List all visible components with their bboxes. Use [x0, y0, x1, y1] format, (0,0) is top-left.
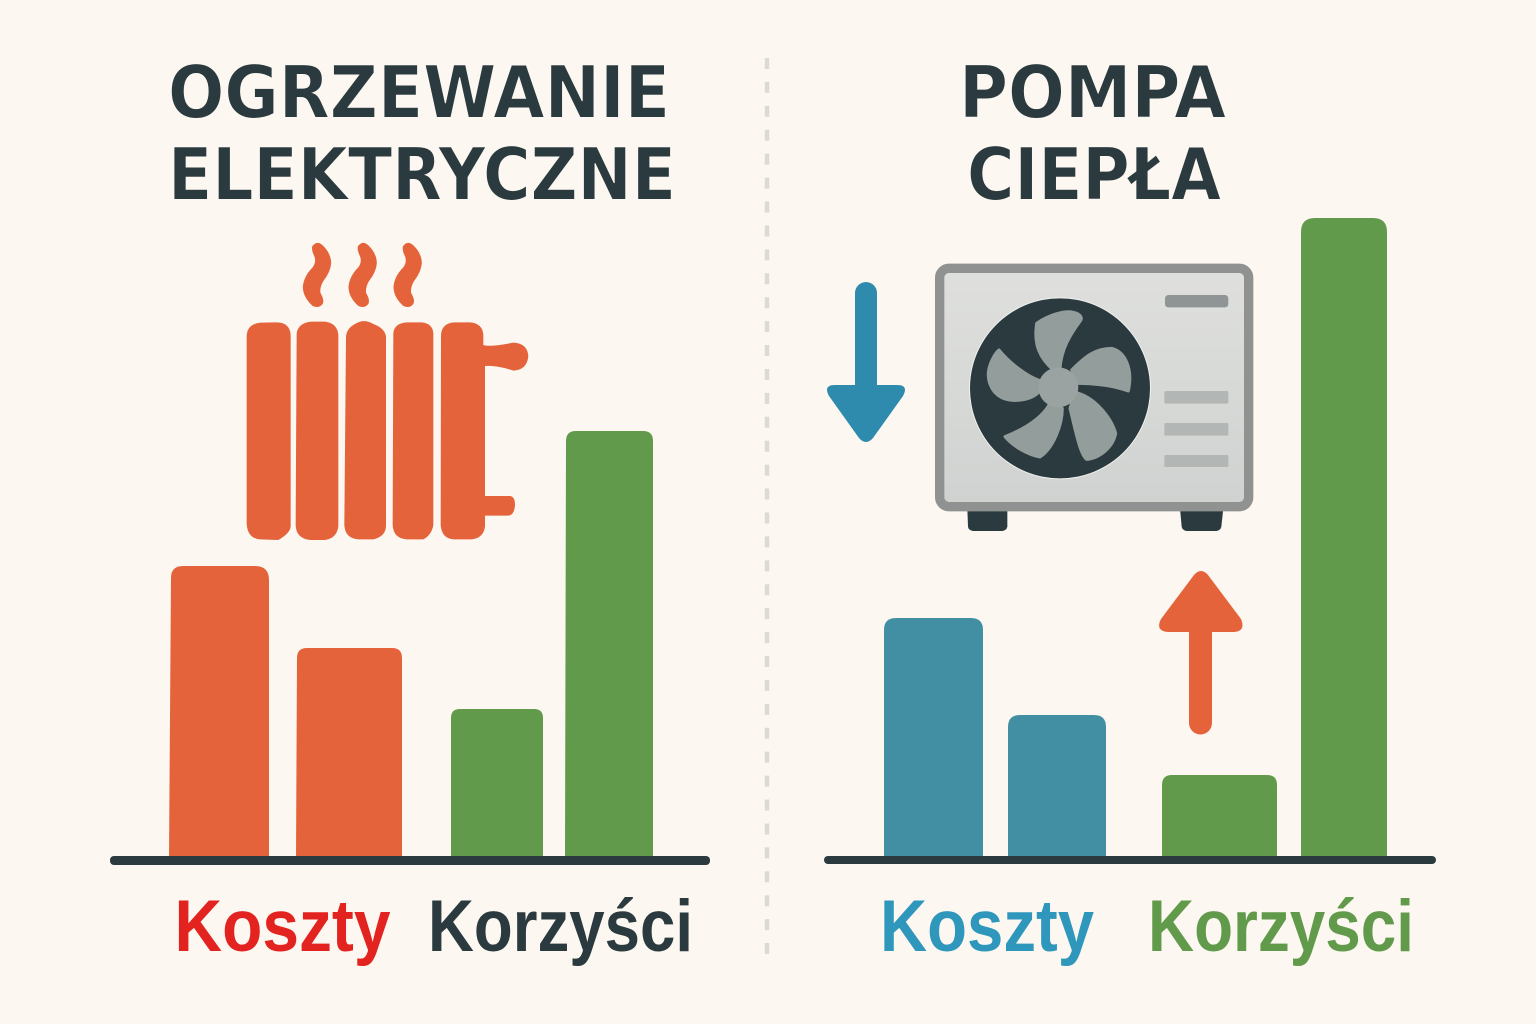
title: ogrzewanie elektryczne: OGRZEWANIE [168, 50, 670, 134]
icon: radiator with heat waves [247, 244, 528, 540]
arrow: down blue [827, 282, 905, 442]
icon: heat waves [304, 244, 421, 306]
title: pompa ciepła: CIEPŁA [967, 132, 1221, 216]
icon: heat pump outdoor unit [940, 268, 1249, 531]
title: ogrzewanie elektryczne [168, 50, 676, 216]
bar chart: electric heating [110, 431, 710, 865]
title: ogrzewanie elektryczne: ELEKTRYCZNE [168, 132, 676, 216]
labels: electric heating: Koszty [174, 886, 391, 967]
labels: heat pump [880, 886, 1414, 967]
arrow: up orange [1159, 571, 1242, 734]
labels: heat pump: Korzyści [1148, 886, 1414, 967]
labels: heat pump: Koszty [880, 886, 1094, 967]
bar chart: heat pump [824, 218, 1436, 864]
labels: electric heating [174, 886, 693, 967]
labels: electric heating: Korzyści [428, 886, 693, 967]
icon: fan [969, 297, 1151, 479]
title: pompa ciepła: POMPA [959, 50, 1226, 134]
title: pompa ciepła [959, 50, 1226, 216]
